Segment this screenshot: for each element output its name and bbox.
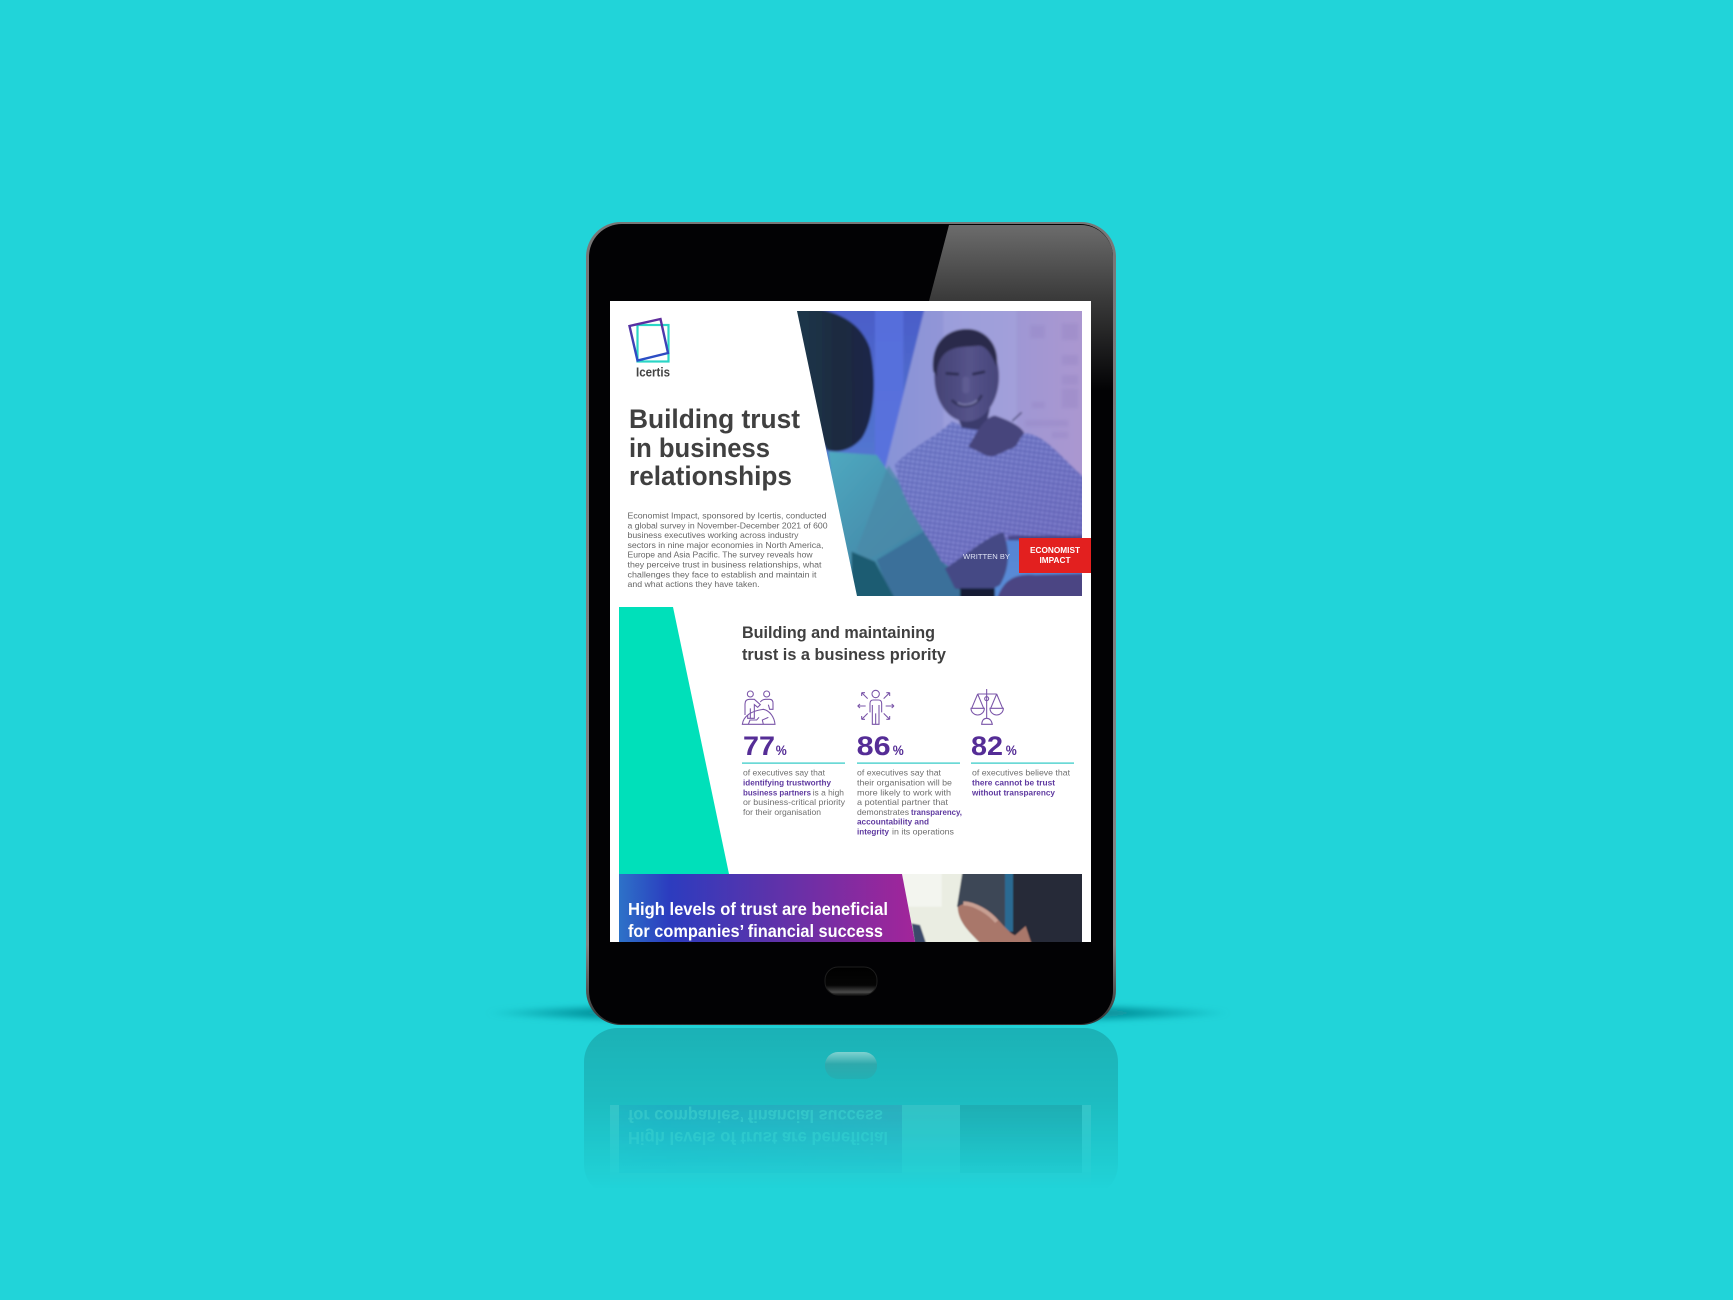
stat column: 86%: %: [893, 743, 904, 758]
economist impact badge: IMPACT: [1040, 555, 1071, 565]
stat column: 77%: for their organisation: [743, 807, 821, 817]
stat column: 77%: identifying trustworthy: [743, 777, 831, 787]
intro paragraph: Economist Impact, sponsored by Icertis, conducted: [628, 510, 827, 520]
screen glare: [929, 225, 1113, 391]
stat column: 82%: [971, 689, 1074, 797]
stat column: 77%: or business-critical priority: [743, 797, 846, 807]
man shirt: [895, 422, 1095, 568]
stat column: 77%: [742, 691, 846, 817]
section heading: trust is a business priority: [742, 646, 947, 664]
teal slanted panel: [619, 607, 729, 874]
stat column: 82%: without transparency: [971, 787, 1055, 797]
stat column: 82%: 82: [971, 731, 1003, 761]
stat column: 77%: %: [776, 743, 787, 758]
stat column: 86%: in its operations: [892, 827, 954, 837]
economist impact badge: [1019, 538, 1091, 573]
economist impact badge: ECONOMIST: [1030, 545, 1081, 555]
stat column: 86%: demonstrates: [857, 807, 909, 817]
intro paragraph: business executives working across industry: [628, 530, 799, 540]
home button: [825, 967, 877, 995]
stat column: 86%: [857, 690, 962, 837]
stat column: 82%: of executives believe that: [972, 768, 1071, 778]
icertis logo: [630, 319, 670, 380]
stat column: 86%: a potential partner that: [857, 797, 949, 807]
section heading: Building and maintaining: [742, 624, 935, 642]
intro paragraph: they perceive trust in business relationships, what: [628, 560, 822, 570]
stat column: 86%: their organisation will be: [857, 777, 952, 787]
gradient banner with heading: for companies’ financial success: [628, 921, 883, 941]
icon: person with outward arrows: [858, 690, 894, 724]
written by label: WRITTEN BY: [963, 552, 1010, 561]
stat column: 86%: accountability and: [857, 817, 929, 827]
stat column: 86%: more likely to work with: [857, 787, 951, 797]
icon: balance scales: [971, 689, 1003, 724]
intro paragraph: a global survey in November-December 2021 of 600: [628, 520, 828, 530]
stat column: 77%: 77: [743, 731, 775, 761]
hero photo: [797, 311, 1082, 596]
icertis logo: Icertis: [636, 364, 670, 380]
icon: partners handshake on globe: [742, 691, 775, 724]
tablet mockup scene: [508, 222, 1208, 1173]
floor shadow: [486, 1002, 1230, 1024]
stat column: 86%: 86: [857, 731, 891, 761]
screen page: [610, 301, 1095, 950]
stat column: 86%: of executives say that: [857, 768, 942, 778]
man head: [934, 332, 999, 422]
stat column: 77%: of executives say that: [743, 768, 826, 778]
intro paragraph: [628, 510, 828, 589]
tablet reflection: High levels of trust are beneficial: [628, 1128, 888, 1148]
gradient banner with heading: High levels of trust are beneficial: [628, 899, 888, 919]
stat column: 77%: business partners: [743, 787, 811, 797]
title: Building trust: [629, 404, 800, 434]
intro paragraph: Europe and Asia Pacific. The survey reveals how: [628, 550, 813, 560]
title: [629, 404, 800, 491]
title: relationships: [629, 461, 792, 491]
intro paragraph: challenges they face to establish and maintain it: [628, 569, 817, 579]
tablet body: [586, 222, 1116, 1025]
stat column: 86%: integrity: [857, 827, 889, 837]
intro paragraph: and what actions they have taken.: [628, 579, 760, 589]
gradient banner with heading: [619, 874, 915, 942]
man hand: [968, 416, 1024, 456]
lower hands: [945, 532, 1008, 595]
section heading: [742, 624, 947, 664]
woman hair: [797, 311, 876, 453]
stat column: 77%: is a high: [813, 787, 844, 797]
stat column: 86%: transparency,: [911, 807, 962, 817]
stat column: 82%: there cannot be trust: [972, 777, 1055, 787]
tablet reflection: for companies’ financial success: [628, 1106, 883, 1126]
title: in business: [629, 433, 770, 463]
tablet reflection: [584, 1028, 1118, 1173]
lower photo: [902, 874, 1082, 942]
stat column: 82%: %: [1006, 743, 1017, 758]
intro paragraph: sectors in nine major economies in North America,: [628, 540, 824, 550]
